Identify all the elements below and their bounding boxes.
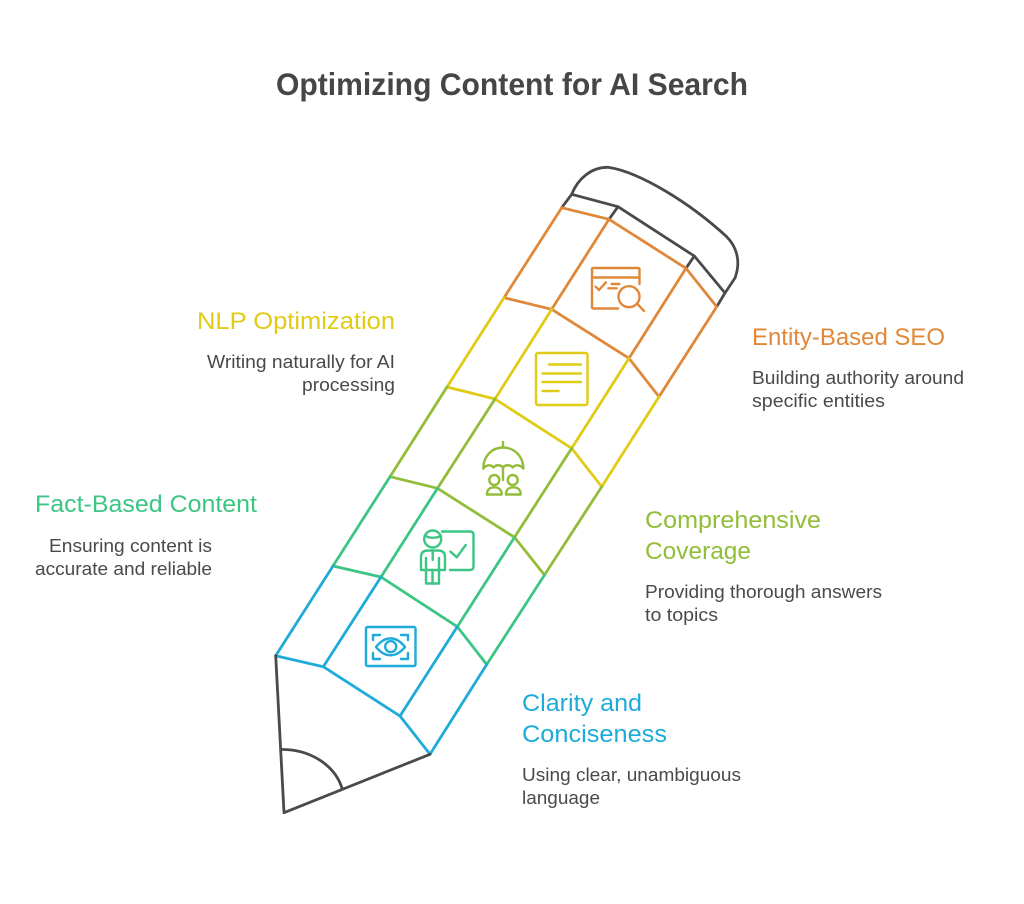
description [522, 764, 741, 808]
description: processing [302, 374, 395, 395]
heading [645, 507, 821, 565]
description: to topics [645, 604, 718, 625]
description: Building authority around [752, 367, 964, 388]
pencil band: Comprehensive Coverage [390, 387, 602, 575]
description [752, 367, 964, 411]
description: Ensuring content is [49, 535, 212, 556]
pencil eraser cap [562, 167, 738, 307]
description: Providing thorough answers [645, 581, 882, 602]
description [645, 581, 882, 625]
heading: Comprehensive [645, 507, 821, 534]
pencil band: Fact-Based Content [333, 477, 544, 664]
description: Using clear, unambiguous [522, 764, 741, 785]
label: Fact-Based Content [35, 491, 257, 579]
heading: Conciseness [522, 721, 667, 748]
label: NLP Optimization [197, 308, 395, 395]
heading: Entity-Based SEO [752, 324, 945, 351]
icon: umbrella over two people [483, 442, 523, 494]
label: Clarity and Conciseness [522, 690, 741, 808]
heading [522, 690, 667, 748]
icon: presenter with checkmark board [421, 530, 474, 584]
heading: NLP Optimization [197, 308, 395, 335]
description [207, 351, 395, 395]
heading: Fact-Based Content [35, 491, 257, 518]
pencil tip [276, 656, 430, 813]
pencil band: NLP Optimization [447, 298, 659, 487]
icon: browser checklist with magnifier [592, 268, 644, 311]
icon: document [536, 353, 588, 405]
description: specific entities [752, 390, 885, 411]
label: Comprehensive Coverage [645, 507, 882, 625]
icon: eye in focus frame [366, 627, 416, 666]
label: Entity-Based SEO [752, 324, 964, 411]
pencil band: Entity-Based SEO [504, 208, 717, 397]
title: Optimizing Content for AI Search [276, 66, 748, 102]
heading: Clarity and [522, 690, 642, 717]
description: language [522, 787, 600, 808]
description: accurate and reliable [35, 558, 212, 579]
heading: Coverage [645, 538, 751, 565]
description: Writing naturally for AI [207, 351, 395, 372]
description [35, 535, 212, 579]
pencil band: Clarity and Conciseness [276, 566, 487, 754]
